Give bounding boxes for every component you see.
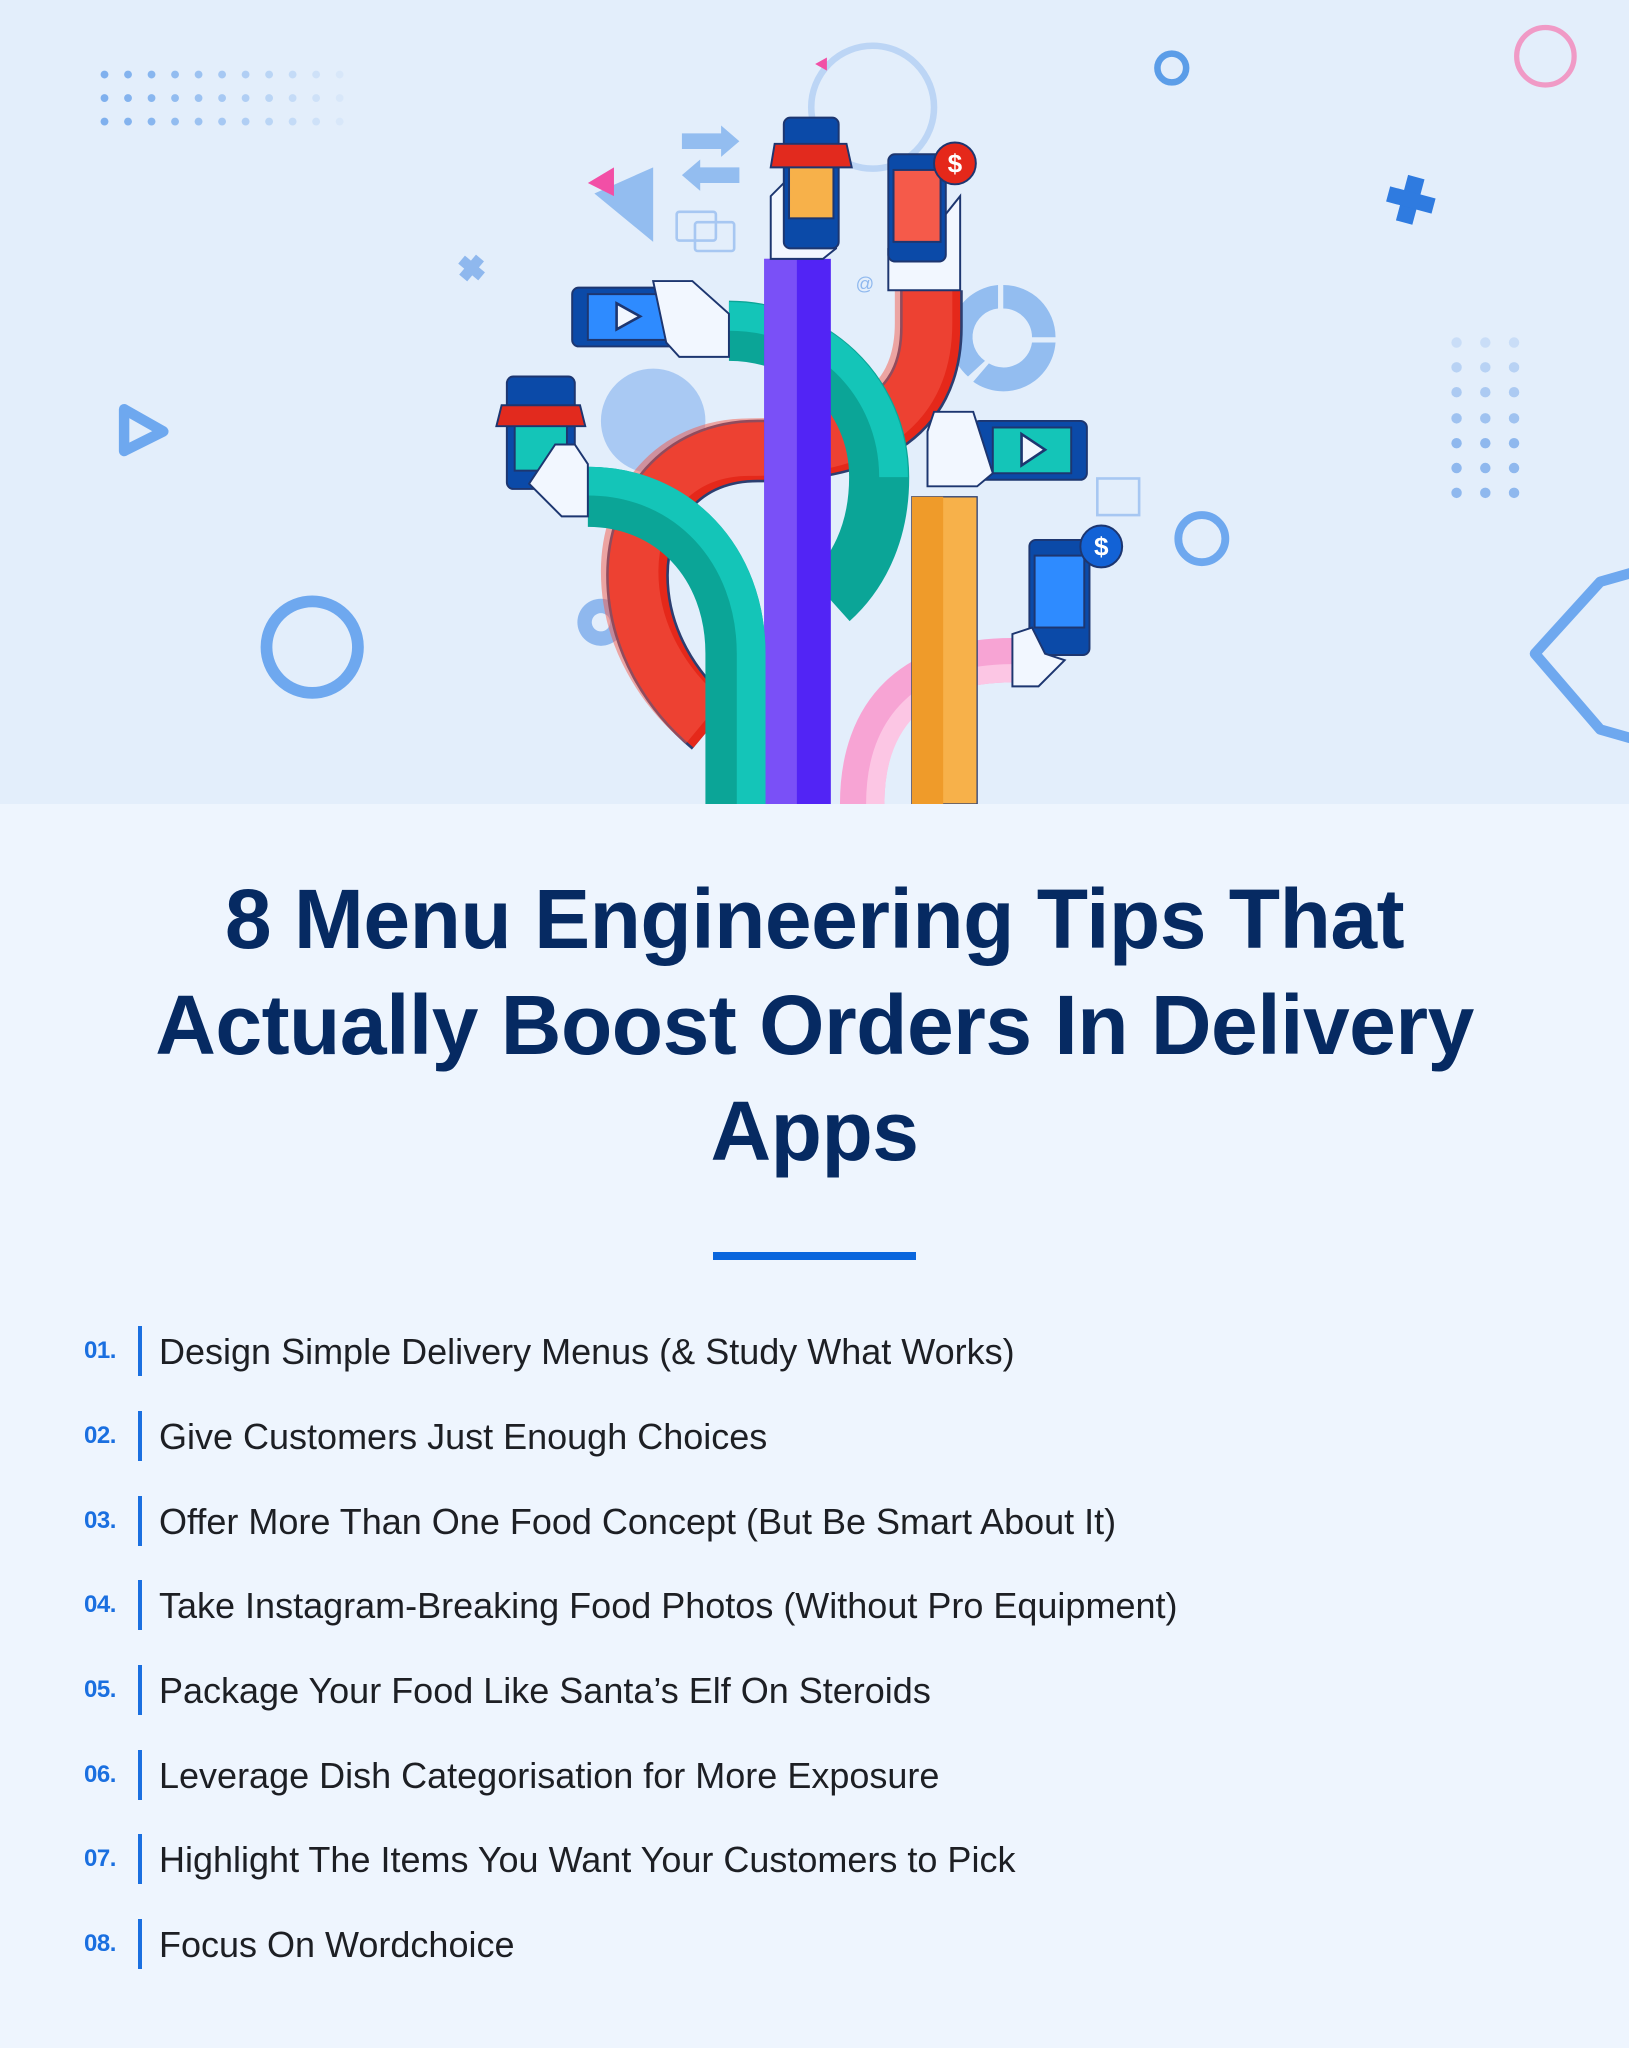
- tip 02: 02.: [84, 1422, 116, 1449]
- tip 06: 06.: [84, 1761, 116, 1788]
- decor: dot grid left: [101, 71, 344, 126]
- tip 04: Take Instagram-Breaking Food Photos (Without Pro Equipment): [159, 1585, 1177, 1626]
- title: 8 Menu Engineering Tips That: [225, 872, 1404, 966]
- hero illustration: $: [1094, 532, 1109, 562]
- hero illustration: $: [948, 149, 963, 179]
- teal left arch: [588, 497, 735, 804]
- tip 01: 01.: [84, 1337, 116, 1364]
- tip 04: 04.: [84, 1591, 116, 1618]
- tip 08: Focus On Wordchoice: [159, 1924, 514, 1965]
- tip 01: Design Simple Delivery Menus (& Study What Works): [159, 1331, 1015, 1372]
- play icons and $: [617, 303, 1045, 465]
- tip 02: Give Customers Just Enough Choices: [159, 1416, 767, 1457]
- tip 03: Offer More Than One Food Concept (But Be Smart About It): [159, 1501, 1116, 1542]
- title: Actually Boost Orders In Delivery: [155, 978, 1474, 1072]
- decor: globe, gear, image: [601, 369, 705, 473]
- tip 08: [84, 1919, 514, 1969]
- decor: cross: [1382, 171, 1440, 229]
- tip 07: 07.: [84, 1845, 116, 1872]
- teal big arch: [729, 331, 879, 599]
- tip 03: 03.: [84, 1507, 116, 1534]
- decor: dot grid right: [1451, 337, 1519, 498]
- list of tips: [84, 1326, 1177, 1969]
- title: Apps: [710, 1084, 918, 1178]
- purple bar: [764, 259, 831, 804]
- title: [155, 872, 1474, 1178]
- decor: triangles & arrows & chat: [594, 167, 653, 242]
- tip 05: 05.: [84, 1676, 116, 1703]
- orange bar: [912, 497, 977, 804]
- tip 07: Highlight The Items You Want Your Customers to Pick: [159, 1839, 1015, 1880]
- pink arm: [862, 660, 1012, 804]
- decor: pie chart: [950, 285, 1056, 391]
- decor: rings and shapes: [124, 27, 1629, 743]
- divider: [713, 1252, 916, 1260]
- tip 06: Leverage Dish Categorisation for More Exposure: [159, 1755, 939, 1796]
- phones with hands: [496, 118, 1122, 686]
- hero illustration: [0, 0, 1629, 804]
- tip 05: Package Your Food Like Santa’s Elf On Steroids: [159, 1670, 931, 1711]
- hero illustration: @: [856, 273, 874, 294]
- tip 08: 08.: [84, 1930, 116, 1957]
- red ring arm: [637, 290, 931, 726]
